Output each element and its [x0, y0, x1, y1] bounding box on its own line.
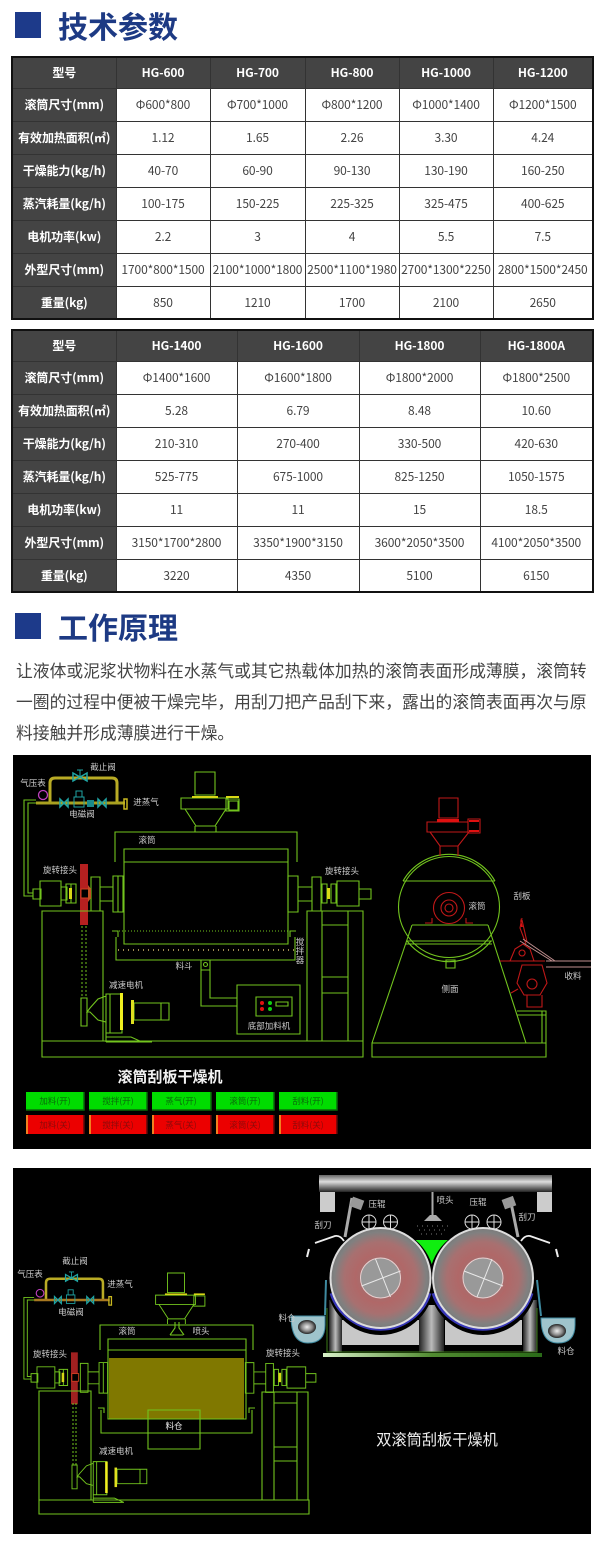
table: parameters HG-600 to HG-1200: 4 — [349, 228, 355, 245]
table: parameters HG-600 to HG-1200: 90-130 — [334, 162, 370, 179]
table: parameters HG-1400 to HG-1800A: 6.79 — [287, 402, 309, 419]
table: parameters HG-1400 to HG-1800A: HG-1800A — [508, 337, 565, 354]
table: parameters HG-600 to HG-1200: HG-600 — [142, 64, 184, 81]
feed motor and hopper — [181, 772, 239, 832]
table: parameters HG-1400 to HG-1800A: 5.28 — [165, 402, 188, 419]
diagram title: 滚筒刮板干燥机 — [117, 1066, 223, 1087]
left drum — [330, 1228, 430, 1328]
table: parameters HG-600 to HG-1200: 3.30 — [435, 129, 457, 146]
labels: pipework: 气压表 — [20, 777, 46, 789]
table: parameters HG-600 to HG-1200: 40-70 — [148, 162, 178, 179]
heading square: working principle — [15, 613, 41, 639]
labels: rotary joints and mixer: 搅 — [296, 936, 305, 948]
table: parameters HG-600 to HG-1200: 2800*1500*2450 — [498, 261, 588, 278]
table: parameters HG-600 to HG-1200: 325-475 — [424, 195, 468, 212]
left bin — [325, 1280, 326, 1315]
table: parameters HG-1400 to HG-1800A: 4350 — [285, 567, 311, 584]
scrapers — [345, 1198, 352, 1237]
table: parameters HG-600 to HG-1200: 4.24 — [531, 129, 554, 146]
table: parameters HG-1400 to HG-1800A: Φ1600*1800 — [264, 369, 332, 386]
table: parameters HG-1400 to HG-1800A: HG-1400 — [152, 337, 201, 354]
table: parameters HG-600 to HG-1200: 400-625 — [521, 195, 564, 212]
frames and base — [42, 911, 363, 1057]
side view of dryer — [372, 798, 591, 1057]
table: parameters HG-600 to HG-1200: 重量(kg) — [41, 294, 88, 311]
labels: double drum assembly: 料仓 — [557, 1345, 575, 1357]
control buttons: on: 加料(开) — [39, 1095, 71, 1107]
table: parameters HG-1400 to HG-1800A: Φ1400*1600 — [143, 369, 210, 386]
table: parameters HG-1400 to HG-1800A: 15 — [413, 501, 426, 518]
labels: rotary joints and mixer: 拌 — [296, 945, 305, 957]
labels: pipework — [20, 761, 159, 820]
table: parameters HG-600 to HG-1200: 2.2 — [155, 228, 171, 245]
control buttons: off: 加料(关) — [39, 1119, 71, 1131]
spray nozzle — [432, 1192, 434, 1215]
table: parameters HG-1400 to HG-1800A: 滚筒尺寸(mm) — [25, 369, 104, 386]
table: parameters HG-600 to HG-1200: 5.5 — [438, 228, 454, 245]
labels: hopper and feeder: 料斗 — [175, 960, 193, 972]
table: parameters HG-600 to HG-1200: HG-1000 — [421, 64, 471, 81]
table: parameters HG-1400 to HG-1800A: 270-400 — [276, 435, 320, 452]
right bin — [537, 1280, 541, 1316]
table: parameters HG-600 to HG-1200: 3 — [254, 228, 261, 245]
table: parameters HG-600 to HG-1200: 2500*1100*1980 — [307, 261, 397, 278]
labels: double drum assembly: 料仓 — [278, 1312, 296, 1324]
table: parameters HG-1400 to HG-1800A: 6150 — [523, 567, 549, 584]
table: parameters HG-600 to HG-1200: 2650 — [530, 294, 556, 311]
control buttons: on: 搅拌(开) — [102, 1095, 134, 1107]
labels: rotary joints and mixer: 旋转接头 — [43, 864, 77, 876]
control buttons: off: 滚筒(关) — [229, 1119, 261, 1131]
table: parameters HG-1400 to HG-1800A: 干燥能力(kg/h) — [23, 435, 106, 452]
labels: double drum assembly — [278, 1194, 575, 1357]
table: parameters HG-600 to HG-1200: 2100*1000*1800 — [213, 261, 302, 278]
steam pipework — [24, 770, 127, 896]
label: drum: 滚筒 — [138, 834, 156, 846]
table: parameters HG-1400 to HG-1800A: 330-500 — [398, 435, 441, 452]
text block: working principle description — [16, 658, 587, 744]
labels: rotary joints: 旋转接头 — [33, 1348, 67, 1360]
labels: pipework: 进蒸气 — [107, 1278, 133, 1290]
top beam — [319, 1175, 552, 1192]
table: parameters HG-1400 to HG-1800A: 3600*2050*3500 — [375, 534, 464, 551]
table: parameters HG-1400 to HG-1800A: HG-1800 — [395, 337, 444, 354]
control buttons: on: 刮料(开) — [292, 1095, 324, 1107]
table: parameters HG-1400 to HG-1800A: 210-310 — [155, 435, 198, 452]
table: parameters HG-1400 to HG-1800A: HG-1600 — [273, 337, 323, 354]
labels: pipework: 电磁阀 — [69, 808, 95, 820]
table: parameters HG-600 to HG-1200: 1210 — [244, 294, 271, 311]
labels: pipework: 电磁阀 — [58, 1306, 84, 1318]
table: parameters HG-1400 to HG-1800A: Φ1800*2000 — [386, 369, 453, 386]
control buttons: off: 搅拌(关) — [102, 1119, 134, 1131]
control buttons: off: 刮料(关) — [292, 1119, 324, 1131]
labels: pipework: 进蒸气 — [133, 796, 159, 808]
table: parameters HG-600 to HG-1200: 干燥能力(kg/h) — [23, 162, 106, 179]
labels: rotary joints and mixer: 器 — [296, 954, 305, 966]
labels: side view: 滚筒 — [468, 900, 486, 912]
base plates and columns — [342, 1320, 419, 1345]
control buttons: off — [26, 1115, 337, 1134]
table: parameters HG-600 to HG-1200: Φ1000*1400 — [412, 96, 480, 113]
text block: working principle description: 料接触并形成薄膜进行干燥。 — [16, 720, 234, 744]
table: parameters HG-600 to HG-1200: 1700*800*1500 — [121, 261, 205, 278]
labels: rotary joints — [33, 1347, 300, 1360]
table: parameters HG-1400 to HG-1800A: 825-1250 — [394, 468, 444, 485]
table: parameters HG-1400 to HG-1800A: 11 — [291, 501, 305, 518]
table: parameters HG-1400 to HG-1800A: Φ1800*2500 — [502, 369, 570, 386]
labels: double drum assembly: 刮刀 — [314, 1219, 332, 1231]
press rollers — [362, 1215, 501, 1229]
labels: rotary joints and mixer: 旋转接头 — [325, 865, 359, 877]
material wedge — [414, 1240, 448, 1280]
table: parameters HG-600 to HG-1200: 2.26 — [341, 129, 363, 146]
table: parameters HG-600 to HG-1200: 150-225 — [236, 195, 279, 212]
table: parameters HG-600 to HG-1200: 电机功率(kw) — [27, 228, 101, 245]
table: parameters HG-600 to HG-1200: 外型尺寸(mm) — [25, 261, 104, 278]
table: parameters HG-1400 to HG-1800A: 4100*2050*3500 — [491, 534, 581, 551]
table: parameters HG-600 to HG-1200: 850 — [153, 294, 173, 311]
table: parameters HG-600 to HG-1200: 1.12 — [152, 129, 174, 146]
table: parameters HG-1400 to HG-1800A: 675-1000 — [273, 468, 323, 485]
right drum — [433, 1228, 533, 1328]
diagram title: 双滚筒刮板干燥机 — [376, 1428, 498, 1450]
text block: working principle description: 让液体或泥浆状物料在水蒸气或其它热载体加热的滚筒表面形成薄膜，滚筒转 — [16, 658, 587, 682]
left rotary joint and gear — [31, 1352, 108, 1404]
table: parameters HG-600 to HG-1200: Φ600*800 — [136, 96, 190, 113]
text block: working principle description: 一圈的过程中便被干燥完毕，用刮刀把产品刮下来，露出的滚筒表面再次与原 — [16, 689, 587, 713]
labels: side view: 侧面 — [441, 983, 459, 995]
table: parameters HG-1400 to HG-1800A: 11 — [170, 501, 183, 518]
labels: rotary joints: 旋转接头 — [266, 1347, 300, 1359]
table: parameters HG-600 to HG-1200: Φ800*1200 — [322, 96, 382, 113]
nozzle — [170, 1322, 184, 1335]
drum blue underlays — [326, 1227, 434, 1335]
table: parameters HG-1400 to HG-1800A: 5100 — [406, 567, 433, 584]
table: parameters HG-600 to HG-1200: 160-250 — [521, 162, 564, 179]
control buttons: on — [26, 1092, 337, 1110]
diagram: drum scraper dryer — [13, 755, 591, 1149]
labels: side view — [441, 890, 582, 995]
table: parameters HG-1400 to HG-1800A: 有效加热面积(㎡) — [18, 402, 110, 419]
right rotary joint — [288, 876, 371, 912]
labels: double drum assembly: 喷头 — [436, 1194, 454, 1206]
labels: drum, nozzle, bin: 喷头 — [192, 1325, 210, 1337]
feeder pipe and bottom feeder — [201, 960, 300, 1034]
labels: hopper and feeder: 底部加料机 — [248, 1020, 291, 1032]
labels: drum, nozzle, bin: 滚筒 — [118, 1325, 136, 1337]
table: parameters HG-600 to HG-1200: HG-700 — [236, 64, 279, 81]
table: parameters HG-600 to HG-1200: 蒸汽耗量(kg/h) — [23, 195, 106, 212]
heading: technical parameters: 技术参数 — [58, 3, 178, 47]
table: parameters HG-600 to HG-1200: 2700*1300*2250 — [401, 261, 491, 278]
diagram: double drum scraper dryer — [13, 1168, 591, 1534]
labels: double drum assembly: 压辊 — [469, 1196, 487, 1208]
labels: rotary joints and mixer — [43, 864, 359, 966]
labels: side view: 收料 — [564, 970, 582, 982]
left rotary joint and gear — [33, 864, 123, 925]
labels: hopper and feeder — [175, 960, 291, 1032]
heading square: technical parameters — [15, 12, 41, 38]
table: parameters HG-1400 to HG-1800A: 外型尺寸(mm) — [25, 534, 104, 551]
control buttons: on: 蒸气(开) — [165, 1095, 197, 1107]
table: parameters HG-600 to HG-1200: 60-90 — [242, 162, 273, 179]
steam pipework — [24, 1272, 111, 1379]
labels: side view: 刮板 — [513, 890, 531, 902]
table: parameters HG-1400 to HG-1800A: 18.5 — [525, 501, 548, 518]
labels: pipework: 气压表 — [17, 1268, 43, 1280]
table: parameters HG-1400 to HG-1800A: 重量(kg) — [41, 567, 88, 584]
table: parameters HG-600 to HG-1200: 130-190 — [424, 162, 468, 179]
table: parameters HG-600 to HG-1200 — [11, 56, 594, 320]
table: parameters HG-600 to HG-1200: 7.5 — [535, 228, 551, 245]
table: parameters HG-1400 to HG-1800A: 电机功率(kw) — [27, 501, 101, 518]
table: parameters HG-600 to HG-1200: 1700 — [339, 294, 365, 311]
control buttons: on: 滚筒(开) — [229, 1095, 261, 1107]
labels: pipework — [17, 1255, 133, 1318]
right-hand double drum assembly — [291, 1175, 575, 1357]
table: parameters HG-600 to HG-1200: 225-325 — [330, 195, 374, 212]
table: parameters HG-1400 to HG-1800A: 3150*1700*2800 — [132, 534, 221, 551]
reducer motor — [81, 993, 169, 1042]
labels: pipework: 截止阀 — [62, 1255, 88, 1267]
labels: double drum assembly: 刮刀 — [518, 1211, 536, 1223]
table: parameters HG-600 to HG-1200: 滚筒尺寸(mm) — [25, 96, 104, 113]
table: parameters HG-600 to HG-1200: Φ1200*1500 — [509, 96, 577, 113]
table: parameters HG-1400 to HG-1800A: 525-775 — [155, 468, 198, 485]
table: parameters HG-1400 to HG-1800A: 10.60 — [522, 402, 551, 419]
table: parameters HG-600 to HG-1200: 2100 — [433, 294, 459, 311]
control buttons: off: 蒸气(关) — [165, 1119, 197, 1131]
heading: working principle: 工作原理 — [58, 604, 178, 648]
table: parameters HG-600 to HG-1200: 有效加热面积(㎡) — [18, 129, 110, 146]
table: parameters HG-1400 to HG-1800A: 1050-1575 — [508, 468, 565, 485]
feed motor and hopper — [156, 1273, 205, 1324]
table: parameters HG-1400 to HG-1800A: 3220 — [163, 567, 190, 584]
table: parameters HG-1400 to HG-1800A: 蒸汽耗量(kg/h) — [23, 468, 106, 485]
table: parameters HG-600 to HG-1200: HG-1200 — [518, 64, 568, 81]
label: reducer motor: 减速电机 — [109, 979, 143, 991]
table: parameters HG-600 to HG-1200: 1.65 — [246, 129, 269, 146]
labels: pipework: 截止阀 — [90, 761, 116, 773]
drum, material fill, cover, trough — [98, 1325, 255, 1449]
table: parameters HG-600 to HG-1200: 型号 — [52, 64, 76, 81]
table: parameters HG-600 to HG-1200: Φ700*1000 — [227, 96, 288, 113]
table: parameters HG-1400 to HG-1800A: 8.48 — [408, 402, 431, 419]
right rotary joint — [245, 1363, 316, 1393]
labels: drum, nozzle, bin — [118, 1325, 210, 1432]
table: parameters HG-1400 to HG-1800A: 420-630 — [515, 435, 558, 452]
table: parameters HG-1400 to HG-1800A — [11, 329, 594, 593]
labels: drum, nozzle, bin: 料仓 — [165, 1420, 183, 1432]
table: parameters HG-600 to HG-1200: HG-800 — [331, 64, 373, 81]
drum and cover — [112, 832, 297, 960]
label: reducer motor: 减速电机 — [99, 1445, 133, 1457]
table: parameters HG-1400 to HG-1800A: 型号 — [52, 337, 76, 354]
frames and base — [39, 1391, 309, 1514]
table: parameters HG-600 to HG-1200: 100-175 — [141, 195, 185, 212]
labels: double drum assembly: 压辊 — [368, 1198, 386, 1210]
reducer motor — [72, 1462, 147, 1502]
table: parameters HG-1400 to HG-1800A: 3350*1900*3150 — [253, 534, 343, 551]
